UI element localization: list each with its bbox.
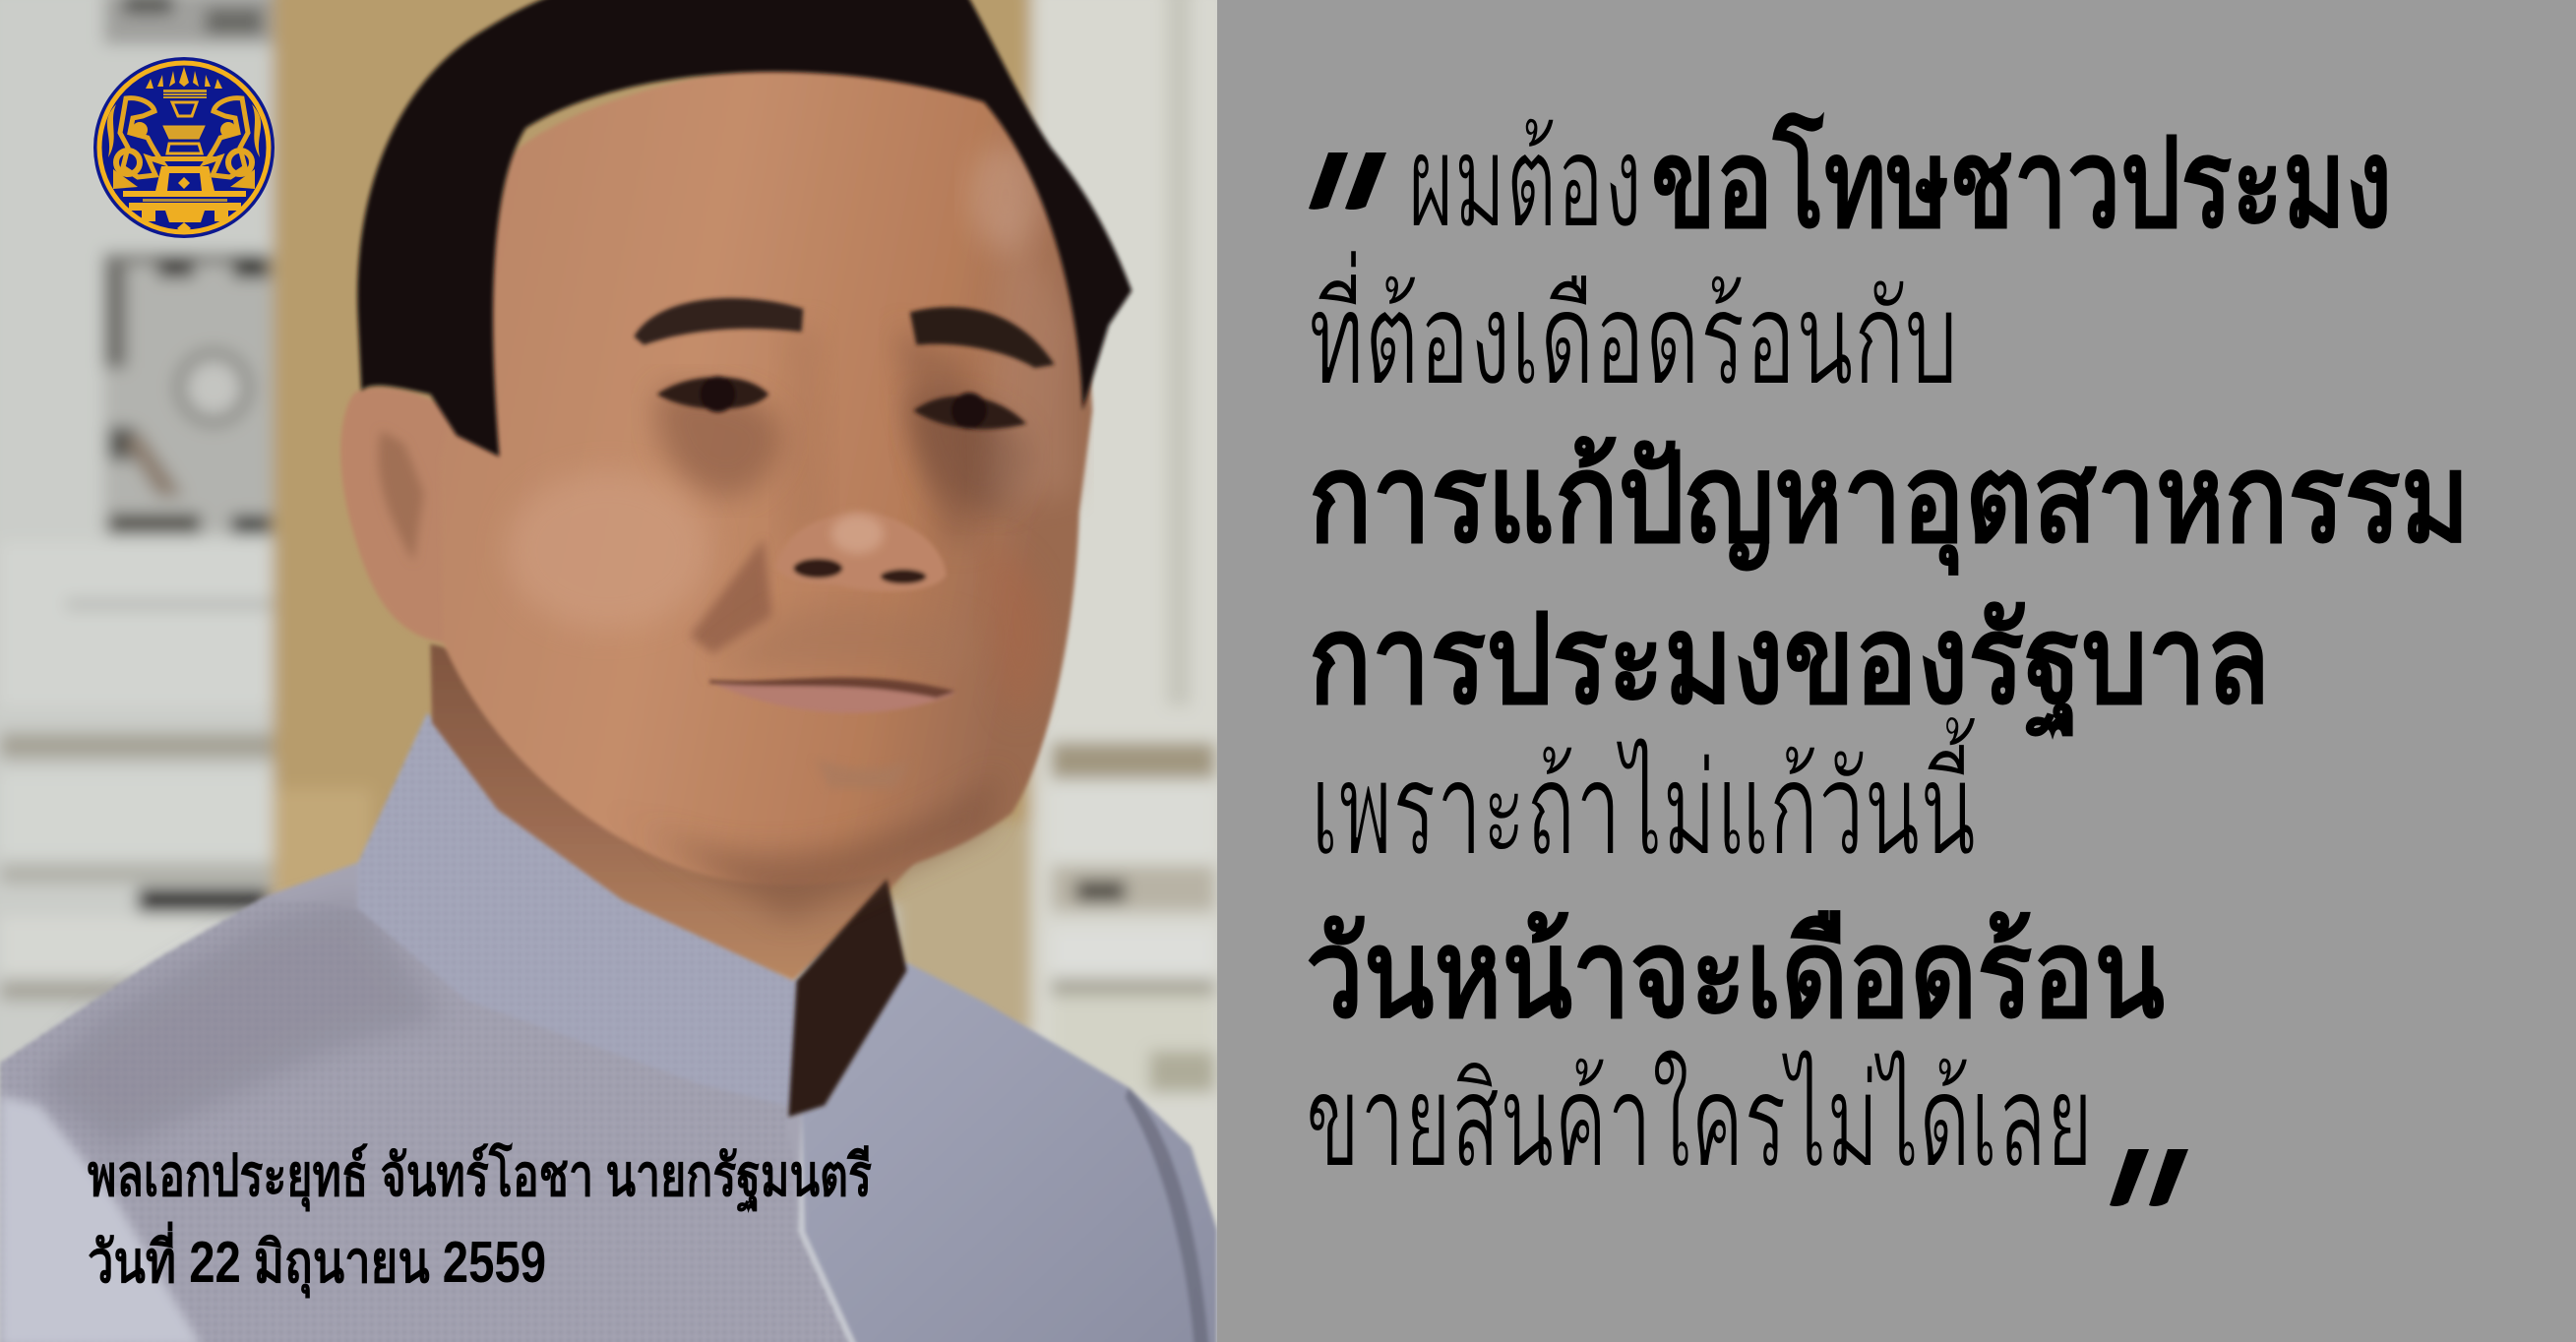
seal: right guardian lion — [206, 98, 261, 189]
caption: speaker name and date: พลเอกประยุทธ์ จันทร์โอชา นายกรัฐมนตรี — [88, 1141, 872, 1213]
seal: left guardian lion — [107, 98, 162, 189]
photo: portrait of the prime minister — [0, 0, 1232, 1342]
line 5: เพราะถ้าไม่แก้วันนี้ — [1311, 716, 1976, 882]
right jacket panel — [802, 962, 1217, 1342]
line 7: ขายสินค้าใครไม่ได้เลย — [1306, 1049, 2093, 1193]
left column carved panels — [103, 0, 273, 44]
line 6: วันหน้าจะเดือดร้อน — [1306, 904, 2165, 1043]
seal: flame ornament — [146, 67, 222, 89]
neck — [430, 643, 986, 981]
nose and mouth — [709, 513, 956, 713]
ear — [340, 387, 476, 643]
hair — [357, 0, 1132, 457]
left sleeve highlight — [0, 1096, 202, 1342]
line 4: การประมงของรัฐบาล — [1309, 590, 2270, 741]
dark gap under collar — [788, 879, 906, 1117]
opening quotation mark — [1309, 152, 1386, 210]
facial shading — [506, 145, 1075, 920]
icon: government seal — [93, 57, 275, 238]
eyebrows and eyes — [634, 298, 1055, 429]
face — [440, 59, 1092, 885]
caption: speaker name and date: วันที่ 22 มิถุนายน 2559 — [88, 1221, 546, 1299]
closing quotation mark — [2110, 1149, 2188, 1206]
quote text — [1306, 109, 2470, 1206]
right column bands — [1051, 743, 1215, 778]
panel: grey quote background — [1217, 0, 2576, 1342]
line 2: ที่ต้องเดือดร้อนกับ — [1309, 250, 1958, 411]
collar — [358, 713, 802, 1106]
photo background: wall and carved columns — [0, 0, 1232, 1342]
caption: speaker name and date — [88, 1141, 872, 1299]
jacket body — [0, 713, 1217, 1342]
seal: central tiered vessel — [123, 90, 246, 234]
line 1: ผมต้อง — [1408, 109, 1642, 254]
